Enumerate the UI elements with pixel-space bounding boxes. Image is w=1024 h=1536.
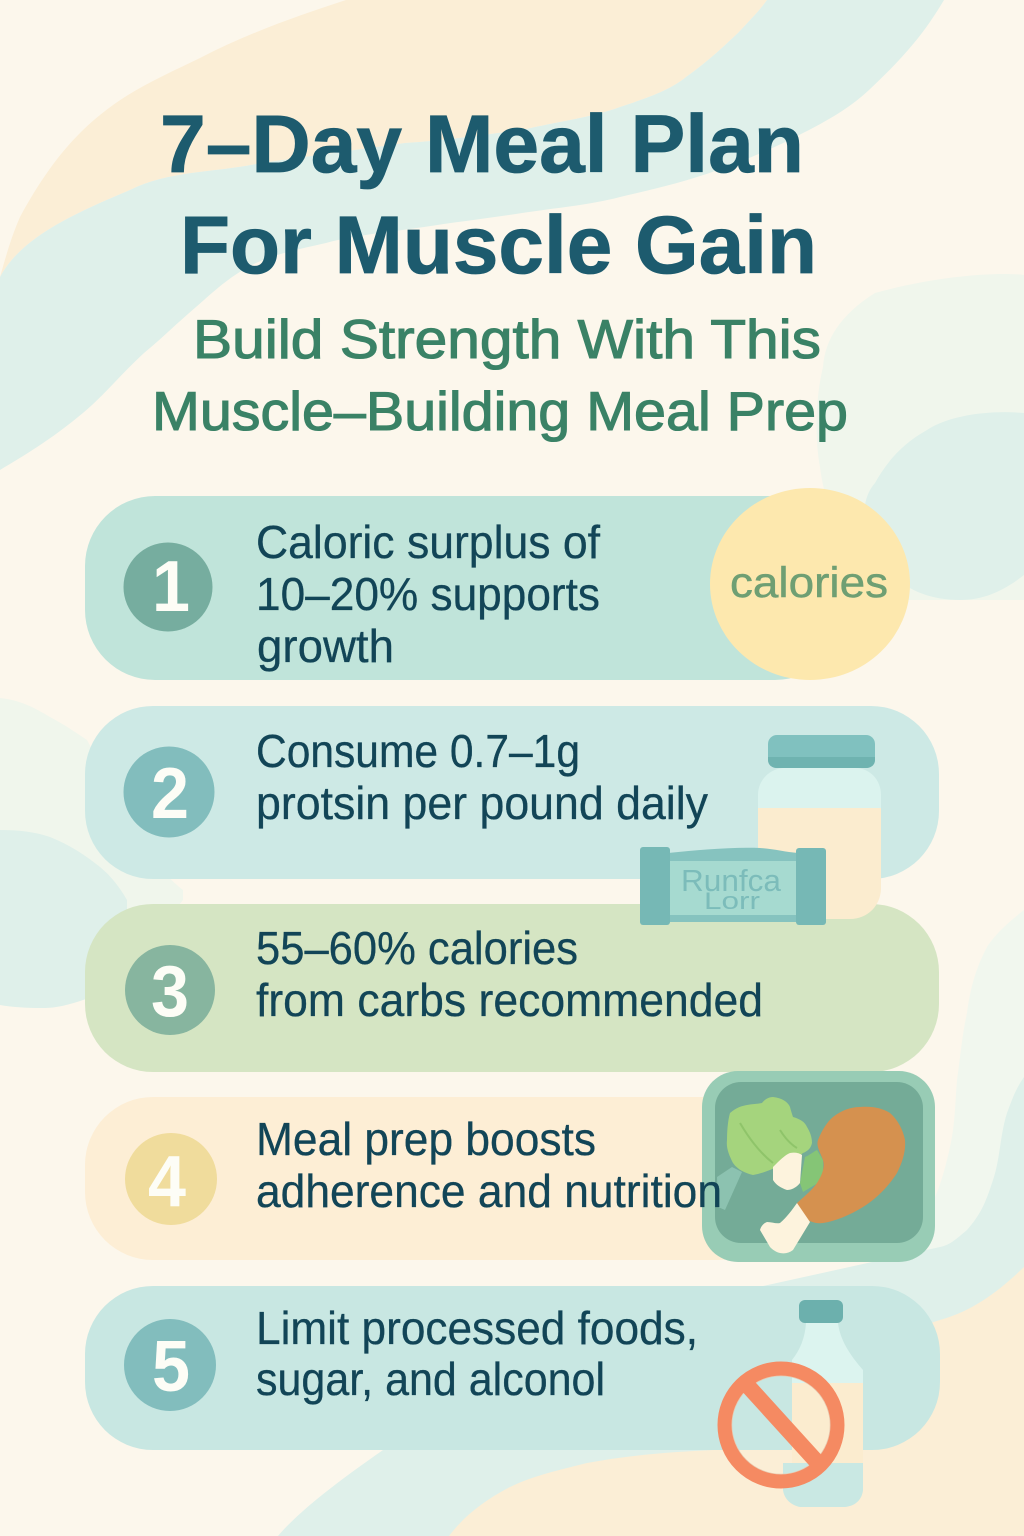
text: carbs: 55–60% calories (256, 922, 578, 974)
subtitle: Muscle–Building Meal Prep (152, 380, 848, 442)
text: limit processed (256, 1302, 698, 1405)
text: limit processed: Limit processed foods, (256, 1302, 698, 1354)
title (160, 99, 817, 291)
icon: calories circle (710, 488, 910, 680)
number badge 4: 4 (148, 1142, 186, 1222)
text: caloric surplus: 10–20% supports (256, 568, 600, 620)
panel: item 1 calories (85, 488, 910, 680)
number badge 1: 1 (152, 547, 190, 627)
icon: protein jar and bar (640, 735, 881, 925)
title: For Muscle Gain (180, 200, 817, 291)
panel: item 5 limit processed (85, 1286, 940, 1450)
text: limit processed: sugar, and alconol (256, 1353, 605, 1405)
number badge 3 (125, 945, 215, 1035)
number badge 2 (124, 746, 214, 838)
number badge 4 (125, 1133, 217, 1225)
icon: protein jar and bar: Lorr (704, 888, 760, 915)
panel: item 2 protein (85, 706, 939, 879)
icon: crossed-out bottle (724, 1300, 863, 1507)
icon: calories circle: calories (730, 559, 888, 607)
text: meal prep (256, 1113, 722, 1217)
text: protein (256, 725, 708, 829)
subtitle: Build Strength With This (193, 308, 821, 370)
text: caloric surplus (256, 516, 600, 672)
icon: meal prep tray with chicken and greens (702, 1071, 935, 1262)
text: meal prep: Meal prep boosts (256, 1113, 596, 1165)
text: caloric surplus: Caloric surplus of (256, 516, 600, 568)
number badge 5: 5 (152, 1327, 190, 1407)
number badge 3: 3 (151, 952, 189, 1032)
number badge 1 (124, 542, 212, 632)
text: carbs: from carbs recommended (256, 974, 763, 1026)
panel: item 4 meal prep (85, 1071, 935, 1262)
text: protein: Consume 0.7–1g (256, 725, 580, 777)
title: 7–Day Meal Plan (160, 99, 804, 190)
text: carbs (256, 922, 763, 1026)
panel: item 3 carbs (85, 904, 939, 1072)
subtitle (152, 308, 848, 442)
icon: protein jar and bar: Runfca (681, 863, 782, 898)
text: protein: protsin per pound daily (256, 777, 708, 829)
text: caloric surplus: growth (257, 620, 394, 672)
text: meal prep: adherence and nutrition (256, 1165, 722, 1217)
number badge 2: 2 (151, 754, 189, 834)
number badge 5 (124, 1319, 216, 1411)
